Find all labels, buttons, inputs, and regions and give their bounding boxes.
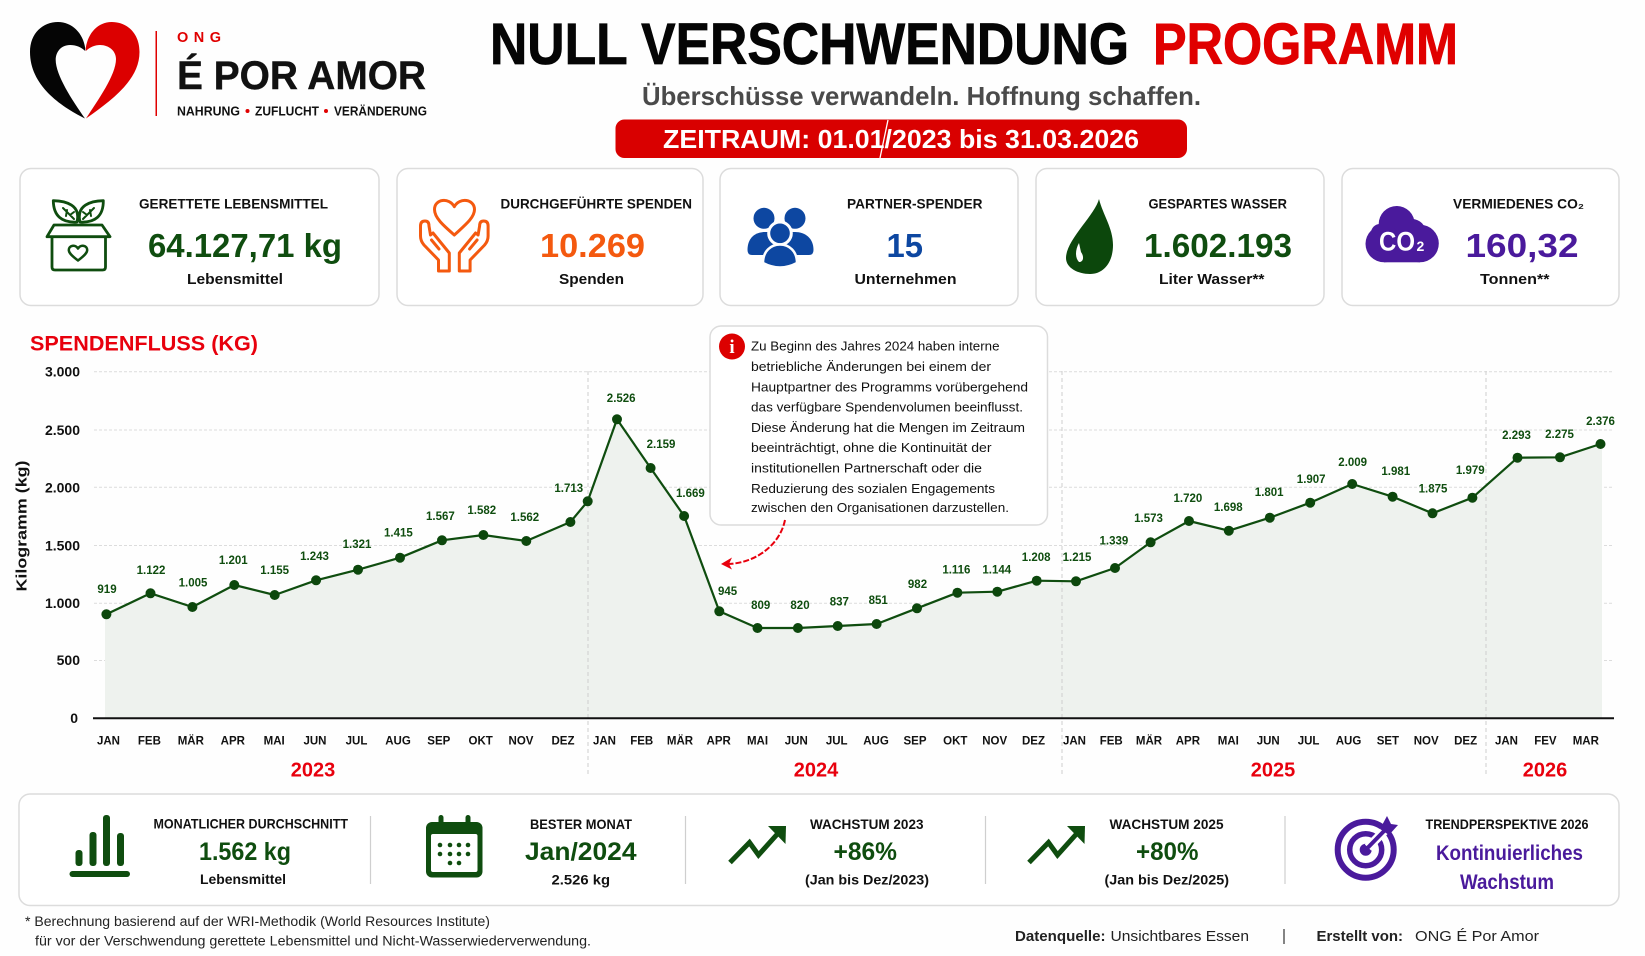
panel: gerettete Lebensmittel [20,168,379,306]
month labels: JAN [593,736,616,748]
icon: food box with leaves [47,201,110,270]
month labels: MAR [1573,736,1600,748]
data value labels: 919 [97,584,117,596]
callout text: Reduzierung des sozialen Engagements [751,482,995,496]
icon: rising arrow [730,826,786,862]
data line [106,419,1600,628]
data value labels: 2.275 [1545,429,1574,441]
panel: gespartes Wasser [1036,168,1324,306]
panel: gerettete Lebensmittel: GERETTETE LEBENSMITTEL [139,196,328,212]
panel: gespartes Wasser: Liter Wasser** [1159,271,1265,288]
month labels: FEB [138,736,161,748]
callout text: beeinträchtigt, ohne die Kontinuität der [751,441,992,455]
data value labels: 820 [790,600,810,612]
month labels: SET [1377,736,1399,748]
stat: growth 2025 [1029,816,1229,888]
icon: bar chart [70,815,130,877]
stat: growth 2025: +80% [1136,838,1198,866]
month labels: MÄR [1136,734,1163,748]
panel: vermiedenes CO2: 160,32 [1466,227,1578,264]
data value labels: 1.907 [1297,474,1326,486]
month labels [97,734,1600,748]
data points [101,414,1605,633]
month labels: MÄR [178,734,205,748]
panel: vermiedenes CO2 [1342,168,1619,306]
y axis labels: 2.500 [45,422,80,438]
line chart: donations per month [14,364,1615,782]
title: PROGRAMM [1153,12,1458,77]
data value labels: 1.562 [510,512,539,524]
panel: gerettete Lebensmittel: 64.127,71 kg [148,227,342,264]
month labels: APR [1176,736,1201,748]
logo: ONG É Por Amor: ZUFLUCHT [255,104,319,118]
month labels: JUN [303,736,327,748]
panel: durchgeführte Spenden: DURCHGEFÜHRTE SPENDEN [500,196,692,212]
title: NULL VERSCHWENDUNG [490,12,1129,77]
panel: durchgeführte Spenden [397,168,703,306]
source credits: Unsichtbares Essen [1110,928,1249,945]
month labels: JAN [1495,736,1518,748]
data value labels: 945 [718,586,738,598]
month labels: SEP [903,736,927,748]
data value labels: 1.669 [676,488,705,500]
month labels: JUN [785,736,808,748]
panel: Partner-Spender: Unternehmen [854,271,956,288]
data value labels: 809 [751,600,770,612]
y axis labels: 0 [70,710,78,726]
source credits: Erstellt von: [1316,928,1403,945]
data value labels: 2.526 [607,393,636,405]
logo: ONG É Por Amor: ONG [177,30,221,46]
stat: best month: BESTER MONAT [530,816,632,832]
year labels [291,760,1567,782]
data value labels: 2.159 [647,439,675,451]
panel: durchgeführte Spenden: 10.269 [540,227,645,264]
data value labels: 1.875 [1419,484,1448,496]
callout: 2024 note [710,326,1048,525]
panel: durchgeführte Spenden: Spenden [559,271,624,288]
callout text: Hauptpartner des Programms vorübergehend [751,380,1028,394]
data value labels: 1.144 [982,564,1012,576]
data value labels: 2.009 [1338,457,1367,469]
data value labels: 1.122 [137,565,165,577]
stat: growth 2023: WACHSTUM 2023 [810,816,924,832]
data value labels: 851 [869,595,888,607]
icon: group of people [748,208,814,268]
stat: growth 2023: +86% [834,838,897,866]
month labels: AUG [1336,736,1361,748]
callout text [751,340,1028,515]
callout text: das verfügbare Spendenvolumen beeinflusst. [751,400,1023,414]
month labels: JUL [346,736,367,748]
data value labels: 1.005 [179,578,208,590]
logo: ONG É Por Amor: É POR AMOR [177,53,426,98]
data value labels: 982 [908,579,927,591]
stat: trend outlook 2026: Kontinuierliches [1436,842,1583,865]
data value labels [97,393,1615,612]
month labels: MAI [1218,736,1239,748]
stat: monthly average: MONATLICHER DURCHSCHNITT [154,816,348,832]
month labels: MAI [264,736,285,748]
stat: best month: Jan/2024 [525,838,637,866]
month labels: JUL [1298,736,1319,748]
icon: target with arrow [1338,816,1398,878]
arrow: callout to drop [721,520,785,570]
data value labels: 1.573 [1134,513,1163,525]
month labels: DEZ [1022,736,1045,748]
month labels: AUG [385,736,411,748]
data value labels: 1.567 [426,511,455,523]
month labels: DEZ [552,736,574,748]
stat: trend outlook 2026 [1338,816,1589,894]
icon: hands holding heart [420,200,488,271]
icon: info [719,334,745,360]
y axis labels: 500 [57,652,80,668]
y axis labels [45,364,80,726]
y axis labels: 2.000 [45,480,80,496]
data value labels: 1.339 [1100,536,1128,548]
data value labels: 1.208 [1022,552,1051,564]
stat: trend outlook 2026: TRENDPERSPEKTIVE 2026 [1426,816,1589,832]
month labels: FEB [630,736,653,748]
source credits: ONG É Por Amor [1415,928,1539,945]
data value labels: 2.293 [1502,430,1531,442]
month labels: OKT [943,736,967,748]
source credits: Datenquelle: [1015,928,1106,945]
month labels: JUL [826,736,848,748]
y axis labels: 1.000 [45,595,80,611]
month labels: NOV [509,736,534,748]
stat: growth 2025: WACHSTUM 2025 [1110,816,1224,832]
month labels: JAN [97,736,120,748]
panel: summary statistics [19,794,1619,906]
month labels: JUN [1257,736,1280,748]
month labels: APR [707,736,732,748]
callout text: Zu Beginn des Jahres 2024 haben interne [751,340,1000,354]
stat: growth 2023 [730,816,929,888]
data value labels: 1.801 [1255,487,1284,499]
month labels: OKT [469,736,493,748]
callout text: zwischen den Organisationen darzustellen. [751,501,1009,515]
month labels: DEZ [1454,736,1477,748]
icon: CO2 cloud: CO [1379,226,1415,256]
stat: monthly average: 1.562 kg [199,838,291,866]
panel: Partner-Spender: PARTNER-SPENDER [847,196,982,212]
subtitle: Überschüsse verwandeln. Hoffnung schaffen. [642,81,1201,111]
month labels: NOV [982,736,1007,748]
panel: vermiedenes CO2: Tonnen** [1480,271,1550,288]
panel: vermiedenes CO2: VERMIEDENES CO₂ [1453,196,1584,212]
data value labels: 2.376 [1586,416,1615,428]
y axis labels: 1.500 [45,538,80,554]
callout text: institutionellen Partnerschaft oder die [751,462,982,476]
data value labels: 837 [830,596,849,608]
icon: water drop [1066,199,1113,274]
year labels: 2026 [1523,760,1567,782]
data value labels: 1.979 [1456,465,1485,477]
year labels: 2025 [1251,760,1295,782]
data value labels: 1.713 [554,483,583,495]
data value labels: 1.321 [343,539,372,551]
stat: best month [426,815,637,888]
stat: monthly average [70,815,348,887]
month labels: APR [221,736,246,748]
period banner: ZEITRAUM: 01.01/2023 bis 31.03.2026 [663,124,1139,154]
data value labels: 1.415 [384,528,413,540]
callout text: betriebliche Änderungen bei einem der [751,360,991,374]
panel: gespartes Wasser: GESPARTES WASSER [1148,196,1287,212]
data value labels: 1.981 [1381,466,1411,478]
month labels: MÄR [667,734,694,748]
data value labels: 1.116 [942,564,970,576]
panel: Partner-Spender: 15 [886,227,923,264]
data value labels: 1.720 [1174,493,1202,505]
area fill [105,419,1602,718]
logo: ONG É Por Amor: NAHRUNG [177,104,240,118]
month labels: FEB [1100,736,1123,748]
footnote: für vor der Verschwendung gerettete Lebensmittel und Nicht-Wasserwiederverwendung. [35,934,591,948]
footnote [25,914,591,948]
y axis labels: 3.000 [45,364,80,380]
month labels: AUG [863,736,889,748]
data value labels: 1.155 [260,565,290,577]
source credits [1015,928,1539,945]
icon: info: i [729,337,735,358]
icon: CO2 cloud: 2 [1416,238,1424,254]
data value labels: 1.243 [300,551,329,563]
stat: trend outlook 2026: Wachstum [1460,871,1554,894]
data value labels: 1.582 [467,505,496,517]
icon: rising arrow [1029,826,1085,862]
data value labels: 1.201 [219,555,248,567]
logo: ONG É Por Amor: VERÄNDERUNG [334,104,427,118]
chart heading: SPENDENFLUSS (KG) [30,332,258,356]
month labels: JAN [1063,736,1086,748]
stat: best month: 2.526 kg [552,872,610,888]
panel: Partner-Spender [720,168,1018,306]
icon: heart [30,22,140,118]
data value labels: 1.215 [1063,552,1092,564]
panel: gerettete Lebensmittel: Lebensmittel [187,271,283,288]
period banner [616,120,1187,158]
callout text: Diese Änderung hat die Mengen im Zeitraum [751,421,1025,435]
logo: ONG É Por Amor [30,22,427,118]
year labels: 2024 [794,760,839,782]
icon: calendar [426,815,482,878]
stat: growth 2025: (Jan bis Dez/2025) [1104,872,1229,888]
stat: monthly average: Lebensmittel [200,871,286,887]
month labels: MAI [747,736,768,748]
year labels: 2023 [291,760,335,782]
month labels: SEP [427,736,451,748]
y axis title: Kilogramm (kg) [14,460,30,592]
month labels: NOV [1414,736,1439,748]
month labels: FEV [1534,736,1557,748]
panel: gespartes Wasser: 1.602.193 [1144,227,1292,264]
stat: growth 2023: (Jan bis Dez/2023) [805,872,929,888]
data value labels: 1.698 [1214,502,1243,514]
icon: CO2 cloud [1366,206,1439,262]
footnote: * Berechnung basierend auf der WRI-Methodik (World Resources Institute) [25,914,490,929]
